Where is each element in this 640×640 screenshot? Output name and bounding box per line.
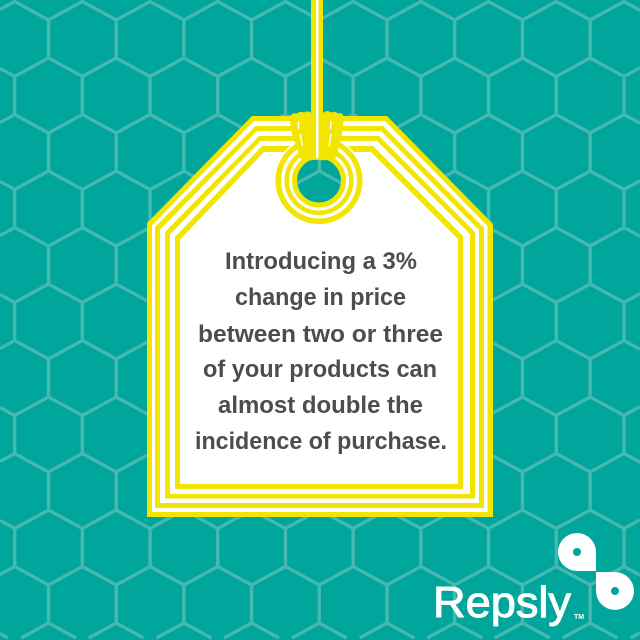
tag message: change in price	[235, 284, 406, 311]
tag message: almost double the	[218, 392, 423, 419]
knot	[290, 110, 344, 160]
price tag	[147, 116, 493, 517]
logo wordmark: Repsly	[433, 578, 571, 627]
trademark: TM	[574, 614, 584, 621]
string	[311, 0, 323, 160]
tag message: between two or three	[198, 321, 443, 348]
tag message: incidence of purchase.	[195, 428, 447, 455]
tag message: of your products can	[203, 356, 437, 383]
tag ring	[276, 140, 362, 224]
tag message	[195, 248, 447, 455]
logo icon	[558, 533, 634, 610]
tag message: Introducing a 3%	[225, 248, 417, 275]
logo: Repsly	[433, 533, 634, 627]
